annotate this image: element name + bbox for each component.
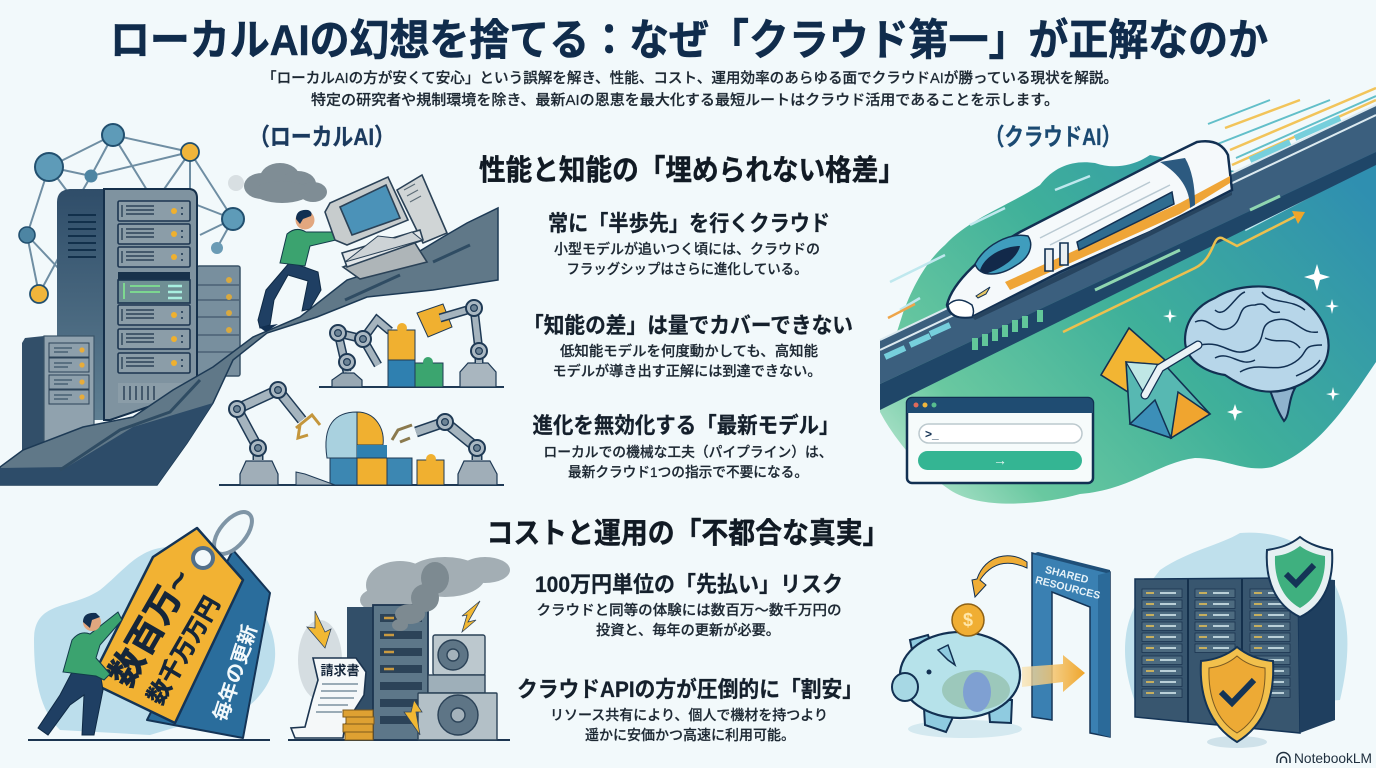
panel: local AI illustration — [0, 124, 504, 485]
mountain slope — [0, 208, 498, 485]
gate: SHARED — [1044, 564, 1090, 586]
panel: cloud AI illustration — [880, 88, 1376, 504]
piggy bank — [892, 604, 1022, 738]
text block: latest model — [532, 413, 840, 480]
piggy bank: $ — [963, 610, 973, 630]
text block: intelligence gap: 「知能の差」は量でカバーできない — [523, 313, 853, 338]
prompt window — [907, 398, 1093, 483]
ground — [288, 739, 510, 741]
old computer — [325, 175, 447, 279]
prompt window: >_ — [925, 427, 939, 441]
text block: upfront risk — [535, 572, 843, 638]
text block: intelligence gap — [523, 313, 853, 379]
heading: cost and operations: コストと運用の「不都合な真実」 — [486, 517, 890, 550]
text block: upfront risk: クラウドと同等の体験には数百万～数千万円の — [536, 602, 842, 618]
text block: half step ahead — [548, 211, 830, 277]
billowing smoke — [392, 562, 449, 631]
heading: performance gap: 性能と知能の「埋められない格差」 — [479, 154, 905, 187]
yellow tag: 数百万~ — [100, 561, 200, 693]
person pushing computer — [258, 210, 336, 332]
text block: latest model: 進化を無効化する「最新モデル」 — [532, 413, 840, 438]
main server rack — [57, 189, 197, 420]
green gradient blob — [880, 105, 1376, 504]
label: cloud AI: （クラウドAI） — [985, 124, 1121, 151]
AC units — [418, 635, 497, 740]
text block: upfront risk: 100万円単位の「先払い」リスク — [535, 572, 843, 597]
bullet train — [947, 141, 1232, 320]
rear blue tag — [147, 550, 270, 738]
server — [347, 605, 428, 740]
text block: intelligence gap: モデルが導き出す正解には到達できない。 — [552, 363, 822, 379]
speed streaks — [1225, 88, 1376, 165]
text block: half step ahead: 小型モデルが追いつく頃には、クラウドの — [554, 241, 820, 257]
robot arms and small puzzle — [319, 300, 504, 387]
prompt window: → — [993, 452, 1007, 468]
panel: broken server illustration — [288, 557, 510, 740]
data blocks on track — [975, 310, 1040, 350]
text block: half step ahead: 常に「半歩先」を行くクラウド — [548, 211, 830, 236]
text block: upfront risk: 投資と、毎年の更新が必要。 — [596, 622, 780, 638]
subtitle: 特定の研究者や規制環境を除き、最新AIの恩恵を最大化する最短ルートはクラウド活用であることを示します。 — [311, 91, 1059, 109]
invoice — [291, 658, 366, 738]
text block: intelligence gap: 低知能モデルを何度動かしても、高知能 — [560, 343, 818, 359]
panel: price tag illustration — [28, 505, 275, 740]
data centre racks — [1135, 578, 1335, 733]
straight gold arrow — [1022, 655, 1085, 692]
blue blob — [34, 547, 275, 735]
gold shield — [1201, 647, 1273, 748]
person pushing tag — [38, 612, 122, 735]
rear tag text: 毎年の更新 — [209, 622, 262, 724]
label: local AI: （ローカルAI） — [249, 124, 395, 151]
ring — [207, 505, 259, 561]
subtitle: 「ローカルAIの方が安くて安心」という誤解を解き、性能、コスト、運用効率のあらゆる面でクラウドAIが勝っている現状を解説。 — [262, 69, 1118, 87]
text block: API is cheaper: 遥かに安価かつ高速に利用可能。 — [585, 727, 795, 743]
smoke cloud — [228, 163, 327, 203]
coins — [343, 710, 374, 740]
text block: latest model: 最新クラウド1つの指示で不要になる。 — [568, 464, 808, 480]
gate — [1032, 552, 1110, 737]
green shield — [1267, 537, 1332, 617]
network graph — [19, 124, 244, 303]
gate: RESOURCES — [1034, 574, 1101, 602]
yellow tag: 数千万万円 — [143, 592, 226, 709]
text block: half step ahead: フラッグシップはさらに進化している。 — [566, 261, 808, 277]
gold signal arrow — [1063, 216, 1296, 332]
yellow tag — [90, 528, 243, 723]
text block: API is cheaper — [517, 677, 863, 743]
smoke — [298, 557, 510, 700]
text block: API is cheaper: クラウドAPIの方が圧倒的に「割安」 — [517, 677, 863, 702]
NotebookLM logo: NotebookLM — [1294, 750, 1372, 766]
lightning bolts — [307, 601, 480, 735]
small server — [22, 336, 94, 455]
polyhedron and robot hand — [1101, 328, 1210, 438]
text block: latest model: ローカルでの機械な工夫（パイプライン）は、 — [544, 444, 832, 460]
blue blob — [1125, 533, 1347, 715]
panel: shared resources illustration — [892, 533, 1347, 748]
invoice: 請求書 — [320, 663, 360, 678]
title: ローカルAIの幻想を捨てる：なぜ「クラウド第一」が正解なのか — [110, 17, 1268, 65]
rail track — [880, 105, 1376, 384]
back server — [197, 266, 240, 376]
subtitle — [262, 69, 1118, 109]
ground line — [28, 739, 270, 741]
brain — [1185, 286, 1329, 421]
robot arms and puzzle sphere — [219, 382, 504, 485]
curved gold arrow — [972, 556, 1027, 597]
text block: API is cheaper: リソース共有により、個人で機材を持つより — [550, 707, 828, 723]
sparkles — [1163, 264, 1340, 421]
